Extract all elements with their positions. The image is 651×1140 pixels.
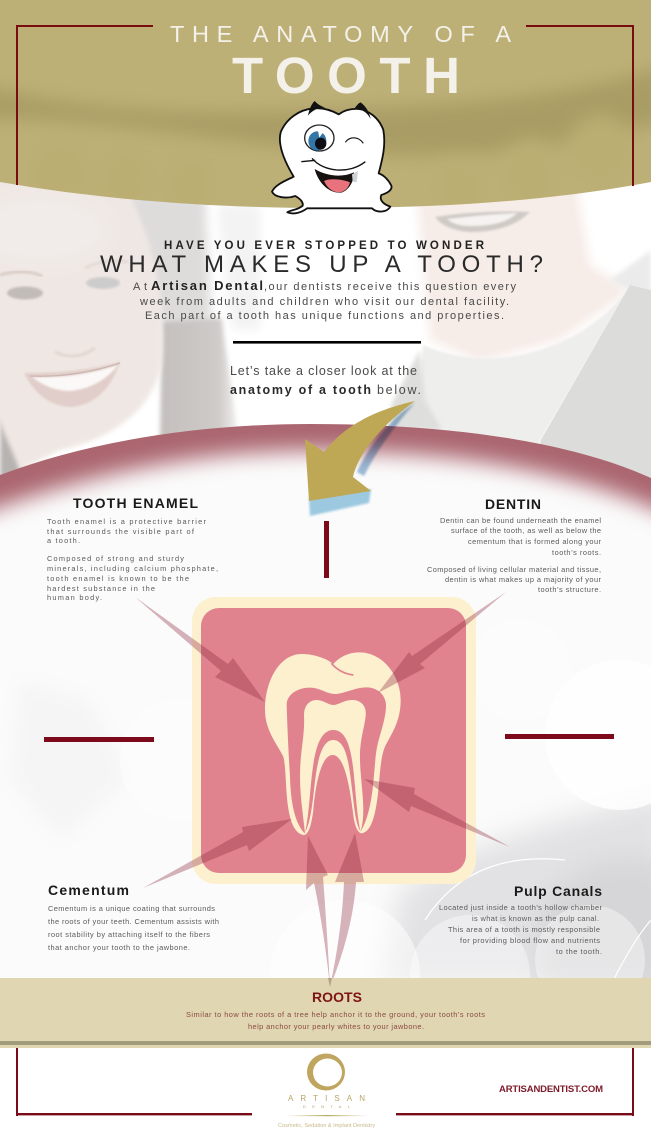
body: help anchor your pearly whites to your jawbone. — [248, 1022, 424, 1031]
panel: cementum text — [48, 882, 219, 952]
body: tooth enamel is known to be the — [47, 574, 189, 583]
body: root stability by attaching itself to the fibers — [48, 930, 210, 939]
lead-in text: below. — [377, 383, 421, 397]
intro paragraph: ,our dentists receive this question every — [264, 281, 516, 293]
body — [427, 516, 602, 594]
heading: Cementum — [48, 882, 129, 898]
arrow shadow — [309, 403, 415, 516]
logo name: ARTISAN — [288, 1094, 365, 1103]
body: cementum that is formed along your — [468, 537, 602, 546]
arrow: root right — [330, 833, 364, 987]
lead heading and intro text — [100, 240, 543, 322]
body: Cementum is a unique coating that surrounds — [48, 904, 215, 913]
body: for providing blood flow and nutrients — [460, 936, 600, 945]
heading: Pulp Canals — [514, 883, 602, 899]
man: neck and smile — [416, 194, 626, 358]
icon: winking tooth mascot — [272, 101, 392, 213]
body: Tooth enamel is a protective barrier — [47, 517, 207, 526]
decorative red bars — [44, 521, 614, 742]
woman: hair — [0, 190, 260, 490]
panel: tooth enamel text — [47, 495, 218, 602]
lead-in text — [230, 364, 421, 397]
arrow: enamel — [135, 597, 265, 702]
mascot body — [272, 108, 392, 213]
body — [186, 1010, 485, 1031]
x-ray: teeth — [28, 116, 618, 206]
mascot mouth — [315, 169, 354, 193]
photo: smiling couple background — [0, 175, 651, 490]
body: Dentin can be found underneath the enamel — [440, 516, 601, 525]
body: a tooth. — [47, 536, 80, 545]
website: ARTISANDENTIST.COM — [499, 1084, 603, 1095]
root arrow tip over band — [328, 978, 332, 987]
body: human body. — [47, 593, 102, 602]
body: surface of the tooth, as well as below the — [451, 526, 601, 535]
body: Similar to how the roots of a tree help anchor it to the ground, your tooth’s roots — [186, 1010, 485, 1019]
diagram: cream frame — [192, 597, 476, 884]
footer frame — [16, 1048, 634, 1116]
intro paragraph: week from adults and children who visit our dental facility. — [139, 296, 509, 308]
icon: tooth cross-section — [265, 652, 401, 835]
diagram: pink field — [201, 608, 466, 873]
background: grey bottom-right texture — [389, 804, 651, 978]
body — [439, 903, 603, 956]
body — [47, 517, 218, 602]
mascot wink — [345, 138, 363, 143]
body: This area of a tooth is mostly responsible — [448, 925, 600, 934]
intro paragraph — [133, 278, 516, 322]
panel: gold header with dental x-ray — [0, 0, 651, 222]
background: bokeh circles — [264, 652, 651, 978]
mascot eye — [305, 125, 334, 151]
logo: Artisan Dental — [278, 1054, 375, 1129]
body: to the tooth. — [556, 947, 602, 956]
title — [170, 21, 511, 104]
main question: WHAT MAKES UP A TOOTH? — [100, 251, 543, 278]
logo ring — [307, 1054, 345, 1090]
title line 1: THE ANATOMY OF A — [170, 21, 511, 47]
x-ray: gum band — [0, 65, 651, 156]
logo tagline: Cosmetic, Sedation & Implant Dentistry — [278, 1123, 375, 1129]
arrow: dentin — [378, 592, 506, 693]
panel: red dome with anatomy background — [0, 424, 651, 978]
icon: curved gold arrow — [305, 401, 415, 516]
arrow: root left — [306, 836, 330, 987]
body: Composed of strong and sturdy — [47, 554, 184, 563]
intro paragraph: At — [133, 281, 147, 293]
panel: roots band — [0, 978, 651, 1048]
logo: Artisan Dental: DENTAL — [303, 1104, 351, 1109]
man: shirt and sweater — [391, 250, 651, 490]
body: minerals, including calcium phosphate, — [47, 564, 218, 573]
title line 2: TOOTH — [232, 47, 460, 104]
heading: ROOTS — [312, 989, 362, 1005]
body: Composed of living cellular material and tissue, — [427, 565, 601, 574]
panel: pulp canals text — [439, 883, 603, 956]
panel: dentin text — [427, 496, 602, 594]
panel: central tooth diagram — [192, 597, 476, 884]
heading: DENTIN — [485, 496, 541, 512]
heading: TOOTH ENAMEL — [73, 495, 198, 511]
arrow body — [305, 401, 415, 501]
woman: face — [0, 175, 163, 470]
body: the roots of your teeth. Cementum assists with — [48, 917, 219, 926]
arrow: pulp canals — [364, 779, 510, 847]
mascot tufts — [308, 101, 325, 116]
intro paragraph: Artisan Dental — [151, 278, 263, 293]
body: tooth’s structure. — [538, 585, 601, 594]
body: that anchor your tooth to the jawbone. — [48, 943, 190, 952]
body: dentin is what makes up a majority of your — [445, 575, 602, 584]
lead-in text: Let’s take a closer look at the — [230, 364, 417, 378]
body — [48, 904, 219, 952]
arrows pointing to tooth parts — [135, 592, 510, 987]
body: is what is known as the pulp canal. — [472, 914, 599, 923]
arrow: cementum — [143, 819, 292, 888]
body: Located just inside a tooth’s hollow chamber — [439, 903, 603, 912]
body: tooth’s roots. — [552, 548, 601, 557]
eyebrow heading: HAVE YOU EVER STOPPED TO WONDER — [164, 240, 485, 252]
lead-in text: anatomy of a tooth — [230, 383, 371, 397]
header frame — [16, 25, 634, 186]
body: that surrounds the visible part of — [47, 527, 195, 536]
divider — [233, 341, 421, 344]
body: hardest substance in the — [47, 584, 155, 593]
intro paragraph: Each part of a tooth has unique functions and properties. — [145, 310, 504, 322]
mascot smile — [301, 158, 365, 170]
